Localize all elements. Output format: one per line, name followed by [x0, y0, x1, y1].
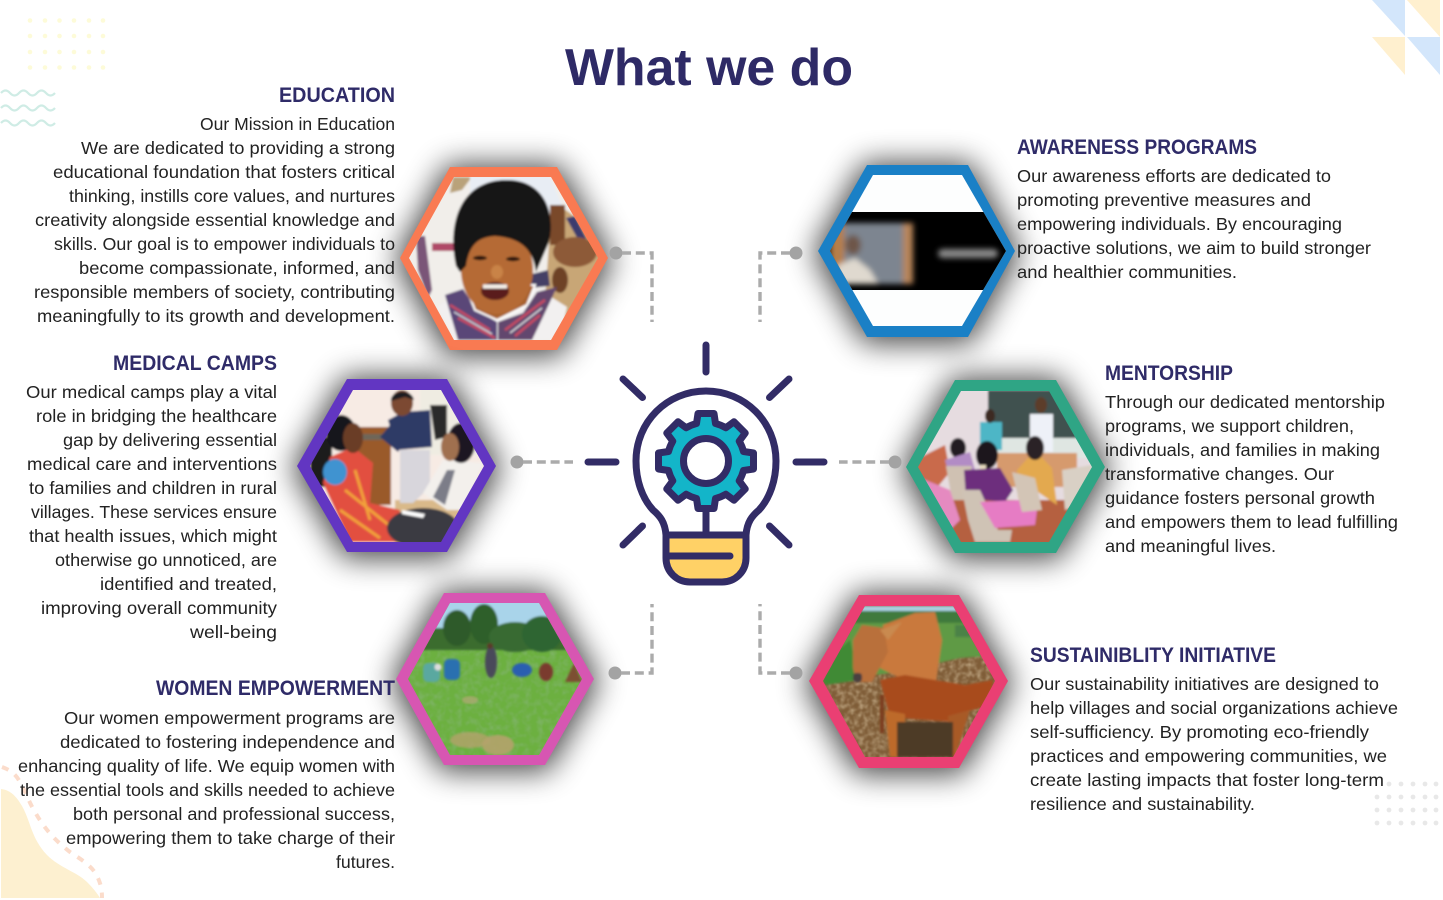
text block: education: We are dedicated to providing a strong — [81, 138, 395, 158]
panel: medical camps text — [26, 352, 277, 642]
title: What we do — [565, 39, 853, 97]
icon: light bulb with gear — [588, 345, 824, 582]
heading: mentorship: MENTORSHIP — [1105, 362, 1233, 385]
decoration: top-right triangles — [1372, 0, 1440, 75]
text block: education: become compassionate, informed, and — [79, 258, 395, 278]
text block: mentorship — [1105, 392, 1398, 556]
text block: education: creativity alongside essential knowledge and — [35, 210, 395, 230]
decoration: grey dot grid — [1375, 782, 1438, 825]
panel: mentorship text — [1105, 362, 1398, 556]
text block: medical camps: otherwise go unnoticed, are — [55, 550, 277, 570]
connector: women empowerment — [608, 604, 652, 680]
text block: education: meaningfully to its growth and development. — [37, 306, 395, 326]
text block: women empowerment: enhancing quality of life. We equip women with — [18, 756, 395, 776]
hexagon photo: awareness programs — [818, 165, 1015, 339]
connector: medical camps — [510, 456, 573, 468]
text block: women empowerment: empowering them to take charge of their — [66, 828, 395, 848]
text block: sustainability: resilience and sustainability. — [1030, 794, 1255, 814]
hexagon photo: women empowerment — [396, 593, 594, 767]
text block: sustainability: Our sustainability initiatives are designed to — [1030, 674, 1379, 694]
text block: women empowerment: futures. — [336, 852, 395, 872]
heading: education: EDUCATION — [279, 84, 395, 107]
connector: mentorship — [839, 456, 902, 468]
text block: sustainability: create lasting impacts that foster long-term — [1030, 770, 1384, 790]
text block: medical camps: well-being — [189, 622, 277, 642]
panel: women empowerment text — [18, 677, 395, 872]
connector: awareness — [760, 246, 802, 322]
text block: awareness programs: Our awareness efforts are dedicated to — [1017, 166, 1331, 186]
text block: education: Our Mission in Education — [200, 114, 395, 134]
text block: medical camps: role in bridging the healthcare — [36, 406, 277, 426]
text block: mentorship: individuals, and families in making — [1105, 440, 1380, 460]
text block: medical camps: Our medical camps play a vital — [26, 382, 277, 402]
text block: medical camps: villages. These services ensure — [31, 502, 277, 522]
text block: medical camps: that health issues, which might — [29, 526, 277, 546]
text block: medical camps — [26, 382, 277, 642]
decoration: teal waves — [1, 90, 55, 126]
text block: education — [34, 114, 395, 326]
panel: sustainability text — [1030, 644, 1398, 814]
text block: women empowerment: dedicated to fostering independence and — [60, 732, 395, 752]
hexagon photo: sustainability — [809, 595, 1008, 770]
heading: women empowerment: WOMEN EMPOWERMENT — [156, 677, 395, 700]
text block: awareness programs: empowering individuals. By encouraging — [1017, 214, 1342, 234]
text block: sustainability: help villages and social organizations achieve — [1030, 698, 1398, 718]
hexagon photo: medical camps — [297, 379, 496, 554]
panel: education text — [34, 84, 395, 326]
text block: education: skills. Our goal is to empower individuals to — [54, 234, 395, 254]
text block: sustainability: self-sufficiency. By promoting eco-friendly — [1030, 722, 1369, 742]
text block: mentorship: programs, we support children, — [1105, 416, 1354, 436]
heading: sustainability: SUSTAINIBLITY INITIATIVE — [1030, 644, 1276, 667]
panel: awareness programs text — [1017, 136, 1371, 282]
text block: women empowerment — [18, 708, 395, 872]
text block: women empowerment: both personal and professional success, — [73, 804, 395, 824]
text block: mentorship: and meaningful lives. — [1105, 536, 1276, 556]
text block: sustainability — [1030, 674, 1398, 814]
text block: sustainability: practices and empowering communities, we — [1030, 746, 1387, 766]
text block: education: responsible members of society, contributing — [34, 282, 395, 302]
text block: medical camps: improving overall community — [41, 598, 277, 618]
text block: medical camps: identified and treated, — [100, 574, 277, 594]
text block: women empowerment: the essential tools and skills needed to achieve — [20, 780, 395, 800]
text block: mentorship: guidance fosters personal growth — [1105, 488, 1375, 508]
text block: medical camps: medical care and interventions — [27, 454, 277, 474]
connector: sustainability — [760, 604, 802, 680]
heading: medical camps: MEDICAL CAMPS — [113, 352, 277, 375]
text block: awareness programs: and healthier communities. — [1017, 262, 1237, 282]
hexagon photo: education — [400, 167, 608, 352]
text block: education: thinking, instills core values, and nurtures — [69, 186, 395, 206]
text block: education: educational foundation that fosters critical — [53, 162, 395, 182]
connector: education — [610, 246, 652, 322]
text block: medical camps: gap by delivering essential — [63, 430, 277, 450]
text block: medical camps: to families and children in rural — [29, 478, 277, 498]
text block: mentorship: Through our dedicated mentorship — [1105, 392, 1385, 412]
text block: awareness programs: promoting preventive measures and — [1017, 190, 1311, 210]
hexagon photo: mentorship — [906, 380, 1105, 555]
text block: awareness programs — [1017, 166, 1371, 282]
heading: awareness programs: AWARENESS PROGRAMS — [1017, 136, 1257, 159]
text block: mentorship: and empowers them to lead fulfilling — [1105, 512, 1398, 532]
text block: mentorship: transformative changes. Our — [1105, 464, 1334, 484]
text block: awareness programs: proactive solutions, we aim to build stronger — [1017, 238, 1371, 258]
text block: women empowerment: Our women empowerment programs are — [64, 708, 395, 728]
decoration: yellow dot grid — [28, 18, 105, 70]
decoration: bottom-left blob — [1, 767, 102, 898]
